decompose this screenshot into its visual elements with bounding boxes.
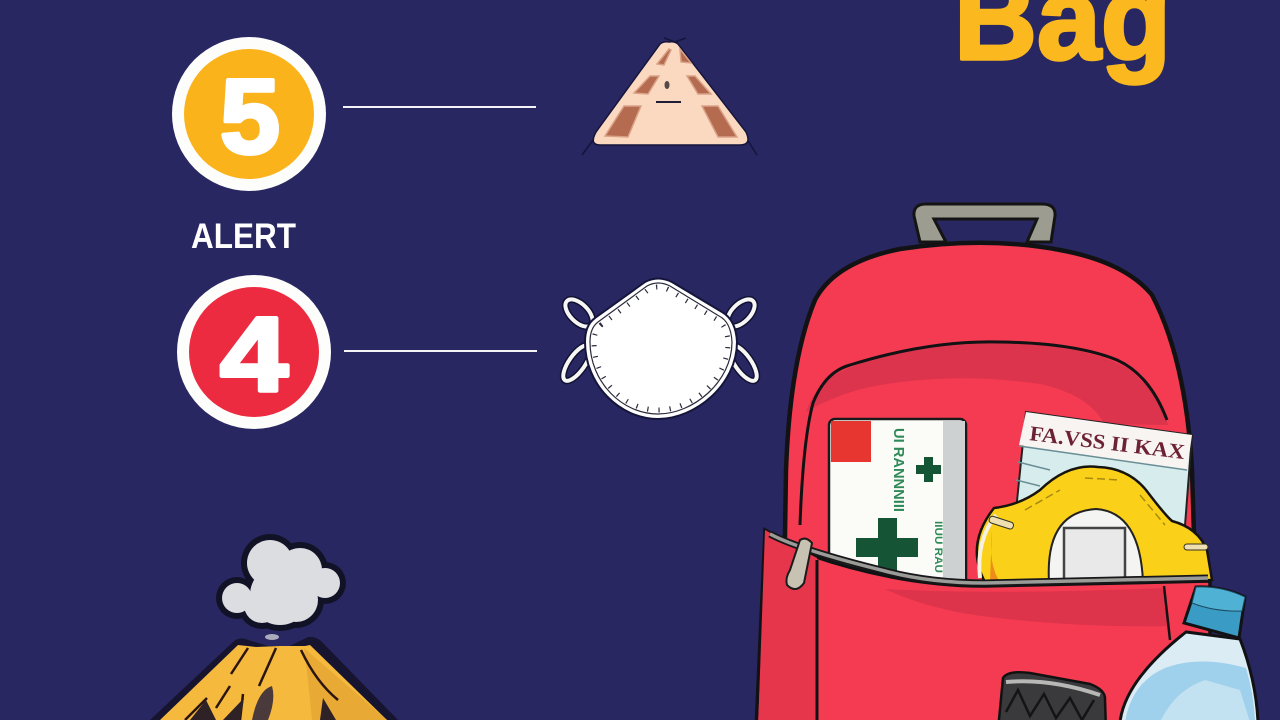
icon: face mask: [558, 278, 762, 419]
badge: alert level 5: [172, 37, 326, 191]
torch: [998, 672, 1106, 720]
water bottle: [1120, 587, 1258, 720]
label: ALERT: ALERT: [191, 217, 296, 256]
backpack handle: [914, 204, 1055, 242]
pocket opening shading: [806, 343, 1168, 425]
front pocket: [756, 530, 1210, 720]
emergency leaflet: FA.VSS II KAX: [1028, 421, 1186, 464]
first aid kit: IIUU RAU: [932, 521, 944, 573]
badge: alert level 4: [177, 275, 331, 429]
badge: alert level 5: 5: [220, 58, 280, 176]
connector line from 5: [343, 106, 536, 108]
icon: volcano: [150, 534, 398, 720]
illustration: backpack: [756, 204, 1258, 720]
zipper: [770, 534, 1208, 583]
yellow respirator: [977, 466, 1212, 582]
smoke plume: [216, 534, 346, 640]
first aid kit: UI RANNNIII: [890, 428, 907, 512]
inner pocket arch: [800, 342, 1167, 525]
connector line from 4: [344, 350, 537, 352]
backpack body: [782, 243, 1200, 720]
emergency leaflet: [1008, 412, 1192, 590]
badge: alert level 4: 4: [220, 296, 288, 414]
first aid kit: [829, 419, 966, 589]
icon: pyramid shelter: [582, 38, 757, 155]
